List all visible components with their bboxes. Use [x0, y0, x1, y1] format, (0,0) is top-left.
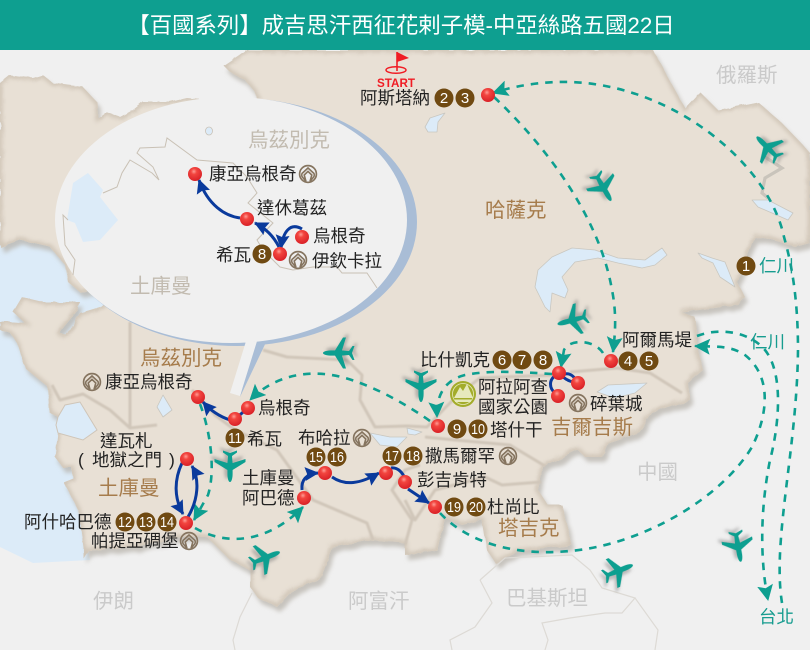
country labels [93, 64, 778, 613]
day badges: 11 [228, 430, 242, 447]
country labels: 哈薩克 [485, 199, 546, 222]
plane 2 [582, 166, 624, 209]
day badges: 15 [309, 449, 323, 466]
day badges: 17 [385, 448, 399, 465]
Lake Alakol [698, 253, 735, 287]
route: Astana to Almaty [494, 97, 615, 352]
day badges: 6 [498, 352, 506, 369]
day badges: 7 [518, 352, 526, 369]
blue shadow of bubble [57, 98, 417, 397]
route: Urgench to Khiva (bubble) [281, 227, 302, 248]
plane 6 [214, 450, 246, 482]
title: 【百國系列】成吉思汗西征花剌子模-中亞絲路五國22日 [127, 13, 675, 38]
country labels: 吉爾吉斯 [551, 416, 633, 439]
plane 3 [554, 301, 592, 339]
city labels [24, 88, 794, 627]
country labels: 烏茲別克 [140, 347, 222, 370]
country labels: 俄羅斯 [716, 64, 778, 87]
city labels: 碎葉城 [590, 394, 642, 414]
day badges: 13 [139, 514, 153, 531]
city labels: ) [169, 450, 175, 470]
plane 5 [406, 370, 436, 402]
day badges: 8 [258, 246, 266, 263]
city labels: 烏根奇 [258, 398, 310, 418]
city labels: 達休葛茲 [257, 198, 327, 218]
plane 7 [245, 538, 286, 578]
route: Bishkek to Tashkent [437, 372, 552, 417]
city labels: 阿爾馬堤 [622, 330, 692, 350]
route: Almaty to Bishkek [561, 342, 603, 367]
city labels: 烏根奇 [313, 226, 366, 246]
teal flight routes [194, 82, 798, 603]
route: Bukhara to Samarkand [332, 473, 379, 483]
route: Dashoguz to Konye-Urgench (bubble) [199, 180, 240, 218]
city labels: 希瓦 [247, 429, 282, 449]
day badges: 1 [742, 258, 750, 275]
pins [179, 88, 618, 530]
plane 9 [720, 528, 756, 564]
plane 8 [598, 551, 639, 591]
route: Bishkek to Burana [562, 374, 578, 383]
route: Incheon to Taipei [697, 332, 778, 600]
city labels: 彭吉肯特 [417, 470, 487, 490]
city labels: 達瓦札 [100, 431, 152, 451]
route: Khiva to Dashoguz (bubble) [255, 223, 279, 247]
day badges: 16 [330, 449, 344, 466]
country borders [52, 322, 682, 545]
world heritage icons [84, 166, 586, 549]
day badges: 12 [118, 514, 132, 531]
Issyk-Kul [597, 383, 647, 398]
start flag: START [377, 76, 416, 90]
Charvak lake [407, 428, 422, 435]
southern neighbour borders [233, 555, 658, 650]
plane 4 [323, 338, 354, 368]
day badges: 9 [453, 421, 461, 438]
day badges: 14 [160, 514, 174, 531]
route: Samarkand to Penjikent [391, 468, 405, 479]
city labels: 塔什干 [490, 420, 542, 440]
city labels: 杜尚比 [487, 497, 540, 517]
country labels: 伊朗 [93, 590, 134, 613]
city labels: ( [78, 450, 84, 470]
day badges: 3 [461, 90, 469, 107]
country labels: 中國 [637, 461, 678, 484]
city labels: 地獄之門 [92, 450, 162, 470]
day badges: 10 [471, 421, 485, 438]
route: Bishkek to Ala Archa [550, 376, 555, 393]
day badges: 4 [624, 353, 632, 370]
route: Dushanbe to Incheon [440, 346, 765, 552]
Lake Balkhash [535, 248, 667, 312]
route: Ashgabat to Darvaza [188, 466, 197, 517]
bubble map: Aral Sea [67, 173, 118, 242]
day badges: 18 [406, 448, 420, 465]
callout bubble [55, 97, 417, 397]
lake near Astana [425, 113, 445, 132]
route: Konye-Urgench to Ashgabat [194, 404, 212, 520]
city labels: 阿斯塔納 [360, 88, 430, 108]
route: Darvaza to Ashgabat [176, 463, 183, 514]
navy land routes [176, 180, 578, 517]
city labels: 布哈拉 [298, 428, 350, 448]
route: Ashgabat to Mary [195, 507, 303, 539]
bubble map: borders [103, 138, 377, 288]
city labels: 仁川 [759, 256, 794, 276]
city labels: 仁川 [750, 332, 785, 352]
Kara-Bogaz gulf [56, 402, 97, 440]
plane 1 [746, 126, 790, 170]
start flag [377, 52, 416, 90]
day badges: 19 [447, 499, 461, 516]
city labels: 比什凱克 [420, 350, 490, 370]
city labels: 台北 [759, 607, 794, 627]
city labels: 阿巴德 [242, 488, 294, 508]
country labels: 巴基斯坦 [506, 587, 588, 610]
city labels: 阿拉阿查 [478, 377, 548, 397]
icon: national park badge [450, 381, 476, 407]
title bar [0, 0, 810, 50]
Caspian Sea [0, 232, 130, 563]
route: Penjikent to Dushanbe [408, 489, 429, 503]
country labels: 烏茲別克 [248, 129, 330, 152]
day badges [116, 88, 756, 532]
city labels: 國家公園 [478, 397, 548, 417]
country labels: 土庫曼 [130, 275, 192, 298]
Aydar Lake [370, 433, 407, 447]
day badges: 8 [539, 352, 547, 369]
country labels: 塔吉克 [498, 517, 560, 540]
day badges: 20 [469, 499, 483, 516]
day badges: 5 [645, 353, 653, 370]
city labels: 帕提亞碉堡 [91, 531, 178, 551]
city labels: 康亞烏根奇 [105, 372, 192, 392]
Lake Zaysan [752, 200, 793, 220]
city labels: 康亞烏根奇 [209, 164, 296, 184]
route: Tashkent to Urgench [250, 374, 430, 421]
city labels: 希瓦 [216, 245, 251, 265]
route: Urgench to Konye-Urgench [203, 402, 248, 420]
city labels: 阿什哈巴德 [24, 512, 112, 532]
route: Mary to Bukhara [302, 473, 318, 490]
bubble body [55, 97, 407, 396]
Irtysh river [762, 157, 782, 198]
country labels: 阿富汗 [348, 590, 410, 613]
lakes [157, 113, 793, 447]
route: Taipei to Astana via Incheon [493, 82, 798, 603]
city labels: 撒馬爾罕 [425, 446, 495, 466]
country labels: 土庫曼 [98, 477, 160, 500]
city labels: 伊欽卡拉 [312, 251, 382, 271]
day badges: 2 [440, 90, 448, 107]
bubble map: small lake [206, 127, 212, 135]
city labels: 土庫曼 [242, 468, 294, 488]
Aral remnant [157, 395, 172, 417]
